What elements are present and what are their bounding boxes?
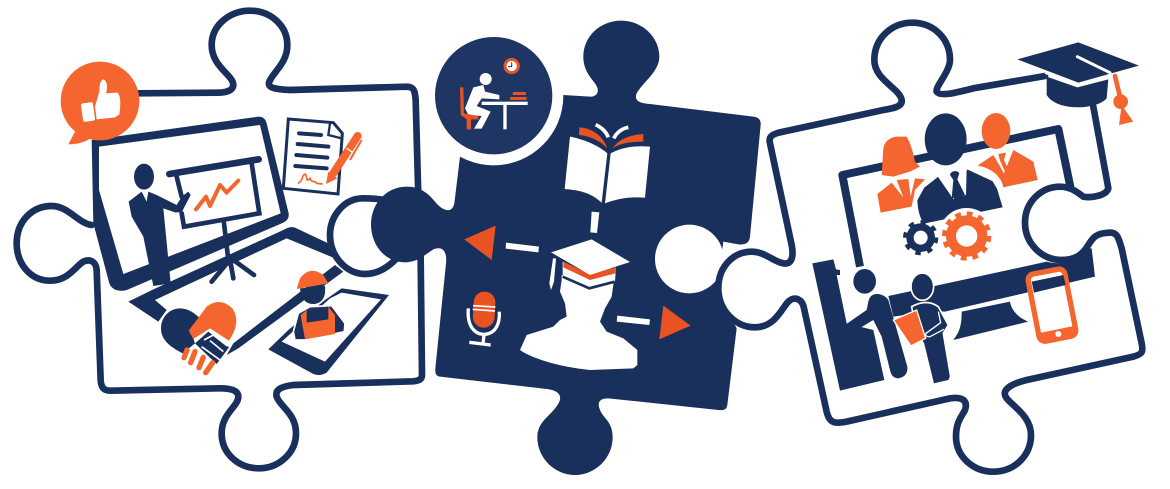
man colleague	[978, 113, 1038, 187]
icon: graduate	[520, 239, 637, 370]
left puzzle piece	[17, 11, 422, 468]
monitor bottom bar	[888, 248, 1095, 317]
center puzzle piece	[371, 21, 761, 475]
handshake	[161, 302, 236, 373]
folder	[893, 310, 926, 346]
monitor frame	[92, 117, 289, 291]
left piece outline	[17, 11, 422, 468]
woman colleague	[877, 137, 925, 213]
icon: large gear	[939, 208, 995, 264]
monitor frame	[842, 129, 1071, 267]
study badge	[435, 37, 552, 154]
person right	[911, 273, 951, 384]
central businessman	[916, 113, 1004, 225]
bubble ring	[424, 26, 563, 165]
graduation cap	[1017, 42, 1139, 125]
person left	[840, 269, 907, 378]
presentation board	[169, 159, 259, 282]
icon: smartphone	[1027, 268, 1077, 342]
socket cut out	[655, 225, 724, 293]
presenter figure	[129, 164, 191, 286]
center piece body	[371, 21, 761, 475]
laptop lower edge	[227, 265, 343, 355]
worker	[293, 271, 345, 340]
icon: small gear	[905, 222, 936, 253]
right puzzle piece	[718, 23, 1142, 472]
thumbs up bubble	[61, 62, 139, 144]
tablet	[268, 288, 389, 375]
signed document	[283, 119, 362, 194]
chart line	[196, 181, 238, 209]
arrow: left	[464, 226, 496, 260]
computer tower	[812, 259, 884, 391]
laptop keyboard edge	[128, 227, 335, 322]
arrow: right	[659, 306, 691, 339]
connector dashes	[506, 212, 650, 325]
right piece outline	[718, 23, 1142, 472]
icon: microphone	[468, 291, 499, 345]
open book	[565, 125, 650, 203]
monitor stand	[953, 302, 1028, 340]
